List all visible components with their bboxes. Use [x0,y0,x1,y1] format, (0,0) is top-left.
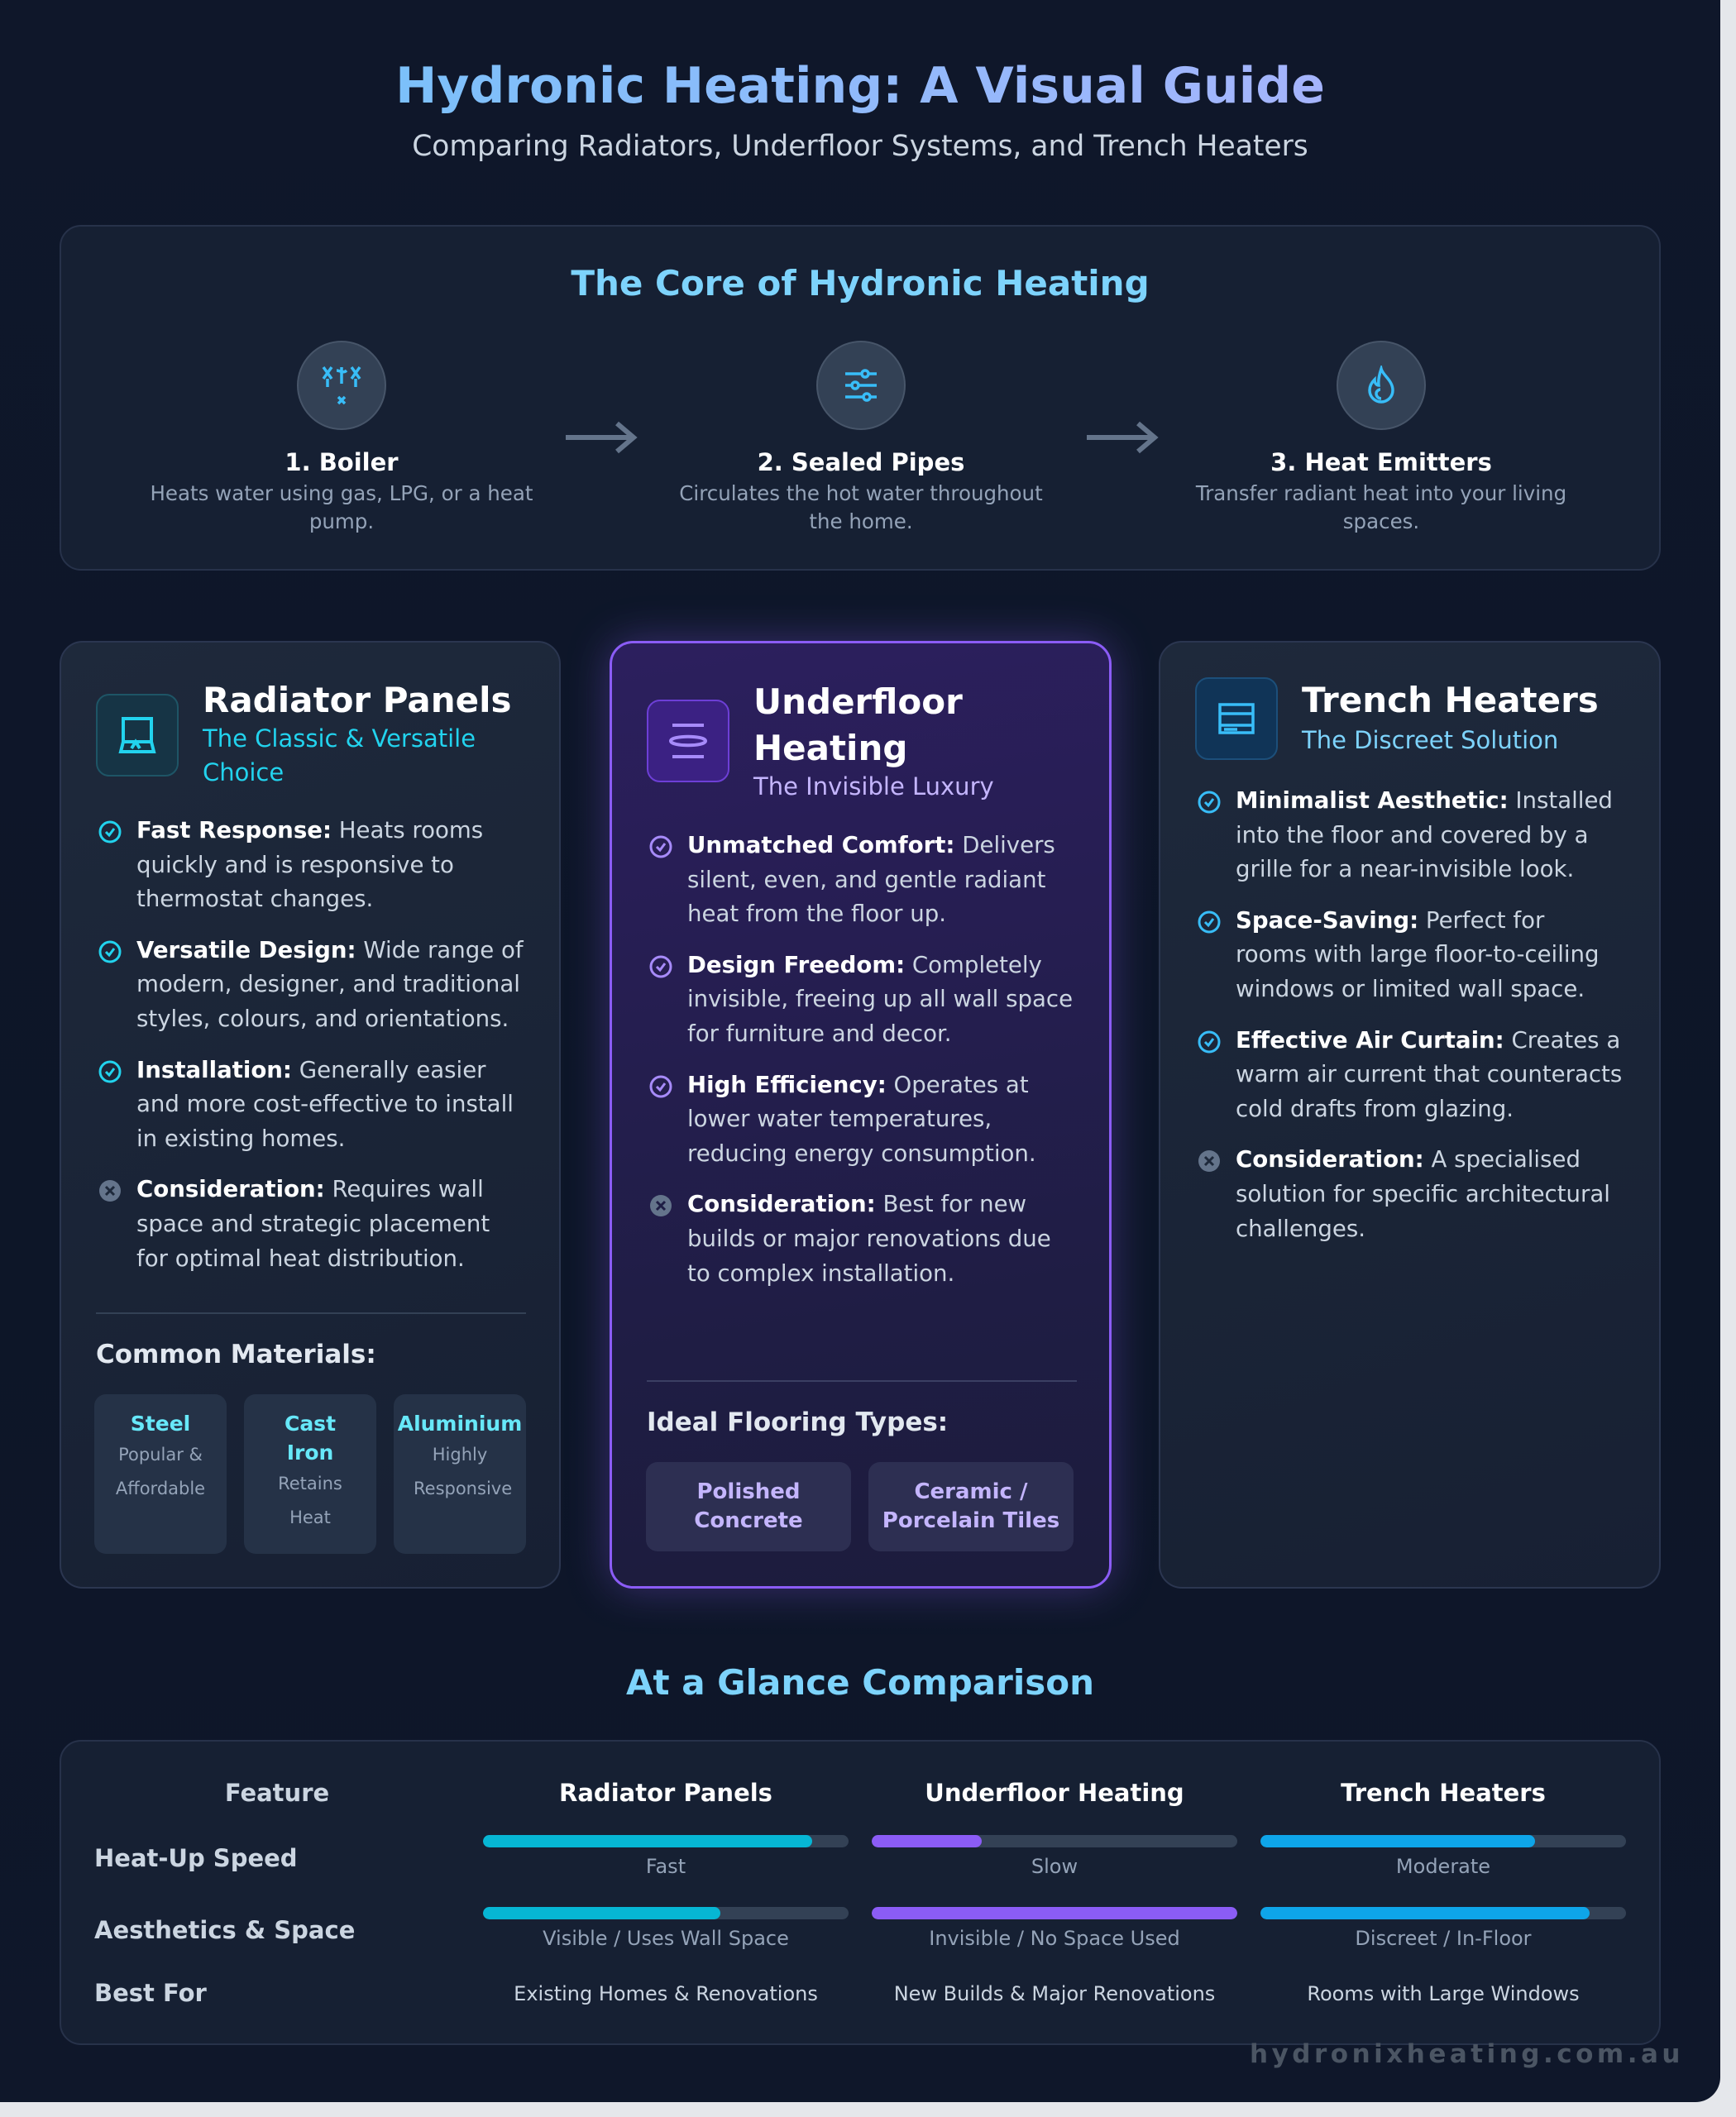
list: trench benefits: rooms with large floor-to-ceiling windows or limited wall space. [1236,940,1600,1002]
material: cast iron [244,1394,376,1554]
flooring: tiles: Ceramic / [914,1479,1028,1504]
list: trench benefits: Consideration: A specialised solution for specific architectural challenges. [1236,1145,1610,1242]
icon: pipes [816,341,906,430]
list: radiator benefits: Installation: Generally easier and more cost-effective to install in existing homes. [136,1056,514,1152]
comparison table content: Invisible / No Space Used [929,1927,1180,1950]
material: aluminium: Aluminium [398,1412,522,1436]
header: trench: Trench Heaters [1302,680,1599,720]
comparison table content: Moderate [1396,1855,1490,1878]
header: underfloor [647,681,994,800]
material: aluminium: Highly Responsive [414,1445,512,1498]
list: underfloor benefits [650,831,1073,1287]
icon: radiator [96,694,179,777]
list: trench benefits [1198,786,1622,1242]
comparison table content: Slow [1031,1855,1078,1878]
text: pipes: 2. Sealed Pipes [758,448,964,476]
text: emitters: 3. Heat Emitters [1270,448,1492,476]
footer: website: hydronixheating.com.au [1250,2039,1684,2069]
comparison table content: New Builds & Major Renovations [894,1982,1215,2005]
material: steel: Steel [131,1412,190,1436]
material: cast iron: Cast [285,1412,336,1436]
comparison table content: Radiator Panels [559,1779,772,1807]
header: underfloor: Underfloor Heating [753,681,963,768]
flooring: concrete: Polished [696,1479,800,1504]
flooring: concrete [646,1462,851,1551]
heading: ideal flooring: Ideal Flooring Types: [647,1407,948,1437]
step: sealed pipes: Circulates the hot water throughout the home. [679,481,1043,533]
material: cast iron: Retains Heat [278,1474,342,1527]
comparison table content [94,1779,1626,2007]
list: underfloor benefits: High Efficiency: Operates at lower water temperatures, reducing energy consumption. [687,1071,1036,1167]
flooring: concrete: Concrete [694,1508,803,1533]
header: trench: The Discreet Solution [1302,726,1558,754]
arrow [1087,422,1158,453]
panel: core of hydronic heating [60,225,1661,571]
flooring: tiles: Porcelain Tiles [882,1508,1059,1533]
comparison table content: Fast [646,1855,686,1878]
list: radiator benefits: Versatile Design: Wide range of modern, designer, and traditional styles, colours, and orientations. [136,936,524,1032]
comparison table content: Trench Heaters [1341,1779,1546,1807]
list: trench benefits: Space-Saving: Perfect for [1236,906,1544,934]
subtitle: Comparing Radiators, Underfloor Systems, and Trench Heaters [412,130,1308,163]
header: trench [1195,677,1599,760]
arrow [566,422,637,453]
materials boxes [94,1394,526,1554]
icon: boiler [297,341,386,430]
material: steel: Popular & Affordable [116,1445,205,1498]
flooring boxes [646,1462,1074,1551]
icon: underfloor [647,700,729,782]
panel: radiator panels [60,641,561,1589]
step: emitters: Transfer radiant heat into your living spaces. [1196,481,1566,533]
list: trench benefits: Minimalist Aesthetic: Installed into the floor and covered by a grille for a near-invisible look. [1236,786,1613,882]
text: boiler: 1. Boiler [285,448,399,476]
list: radiator benefits: for optimal heat distribution. [136,1245,465,1272]
step: sealed pipes [679,341,1043,533]
header: radiator: The Classic & Versatile Choice [203,724,476,786]
heading: comparison: At a Glance Comparison [626,1662,1094,1703]
list: radiator benefits [99,816,524,1272]
title: Hydronic Heating: A Visual Guide [395,57,1325,115]
comparison table content: Visible / Uses Wall Space [543,1927,789,1950]
material: cast iron: Iron [287,1441,333,1465]
header: underfloor: The Invisible Luxury [753,772,994,800]
comparison table content: Existing Homes & Renovations [514,1982,818,2005]
list: underfloor benefits: Unmatched Comfort: Delivers silent, even, and gentle radiant heat from the floor up. [687,831,1055,927]
heading: common materials: Common Materials: [96,1340,376,1369]
panel: trench heaters [1159,641,1661,1589]
panel: comparison table [60,1740,1661,2045]
icon: flame [1337,341,1426,430]
list: underfloor benefits: Consideration: Best for new builds or major renovations due to complex installation. [687,1190,1051,1287]
step: boiler [151,341,533,533]
row: aesthetics: Aesthetics & Space [94,1916,355,1944]
icon: trench [1195,677,1278,760]
row: heat-up speed: Heat-Up Speed [94,1844,298,1872]
step: emitters [1196,341,1566,533]
step: boiler: Heats water using gas, LPG, or a heat pump. [151,481,533,533]
flooring: tiles [868,1462,1074,1551]
comparison table content: Discreet / In-Floor [1355,1927,1532,1950]
list: radiator benefits: Fast Response: Heats rooms quickly and is responsive to thermostat changes. [136,816,483,912]
material: aluminium [394,1394,526,1554]
material: steel [94,1394,227,1554]
list: trench benefits: Effective Air Curtain: Creates a warm air current that counteracts cold drafts from glazing. [1236,1026,1622,1122]
row: best for: Best For [94,1979,207,2007]
header: radiator [96,680,512,786]
heading: core: The Core of Hydronic Heating [571,263,1150,303]
header: radiator: Radiator Panels [203,680,512,720]
list: underfloor benefits: Design Freedom: Completely invisible, freeing up all wall space for furniture and decor. [687,951,1073,1047]
comparison table content: Rooms with Large Windows [1307,1982,1580,2005]
list: radiator benefits: Consideration: Requires wall space and strategic placement [136,1175,490,1237]
panel: underfloor heating [610,641,1112,1589]
table header: Feature [225,1779,329,1807]
comparison table content: Underfloor Heating [925,1779,1184,1807]
